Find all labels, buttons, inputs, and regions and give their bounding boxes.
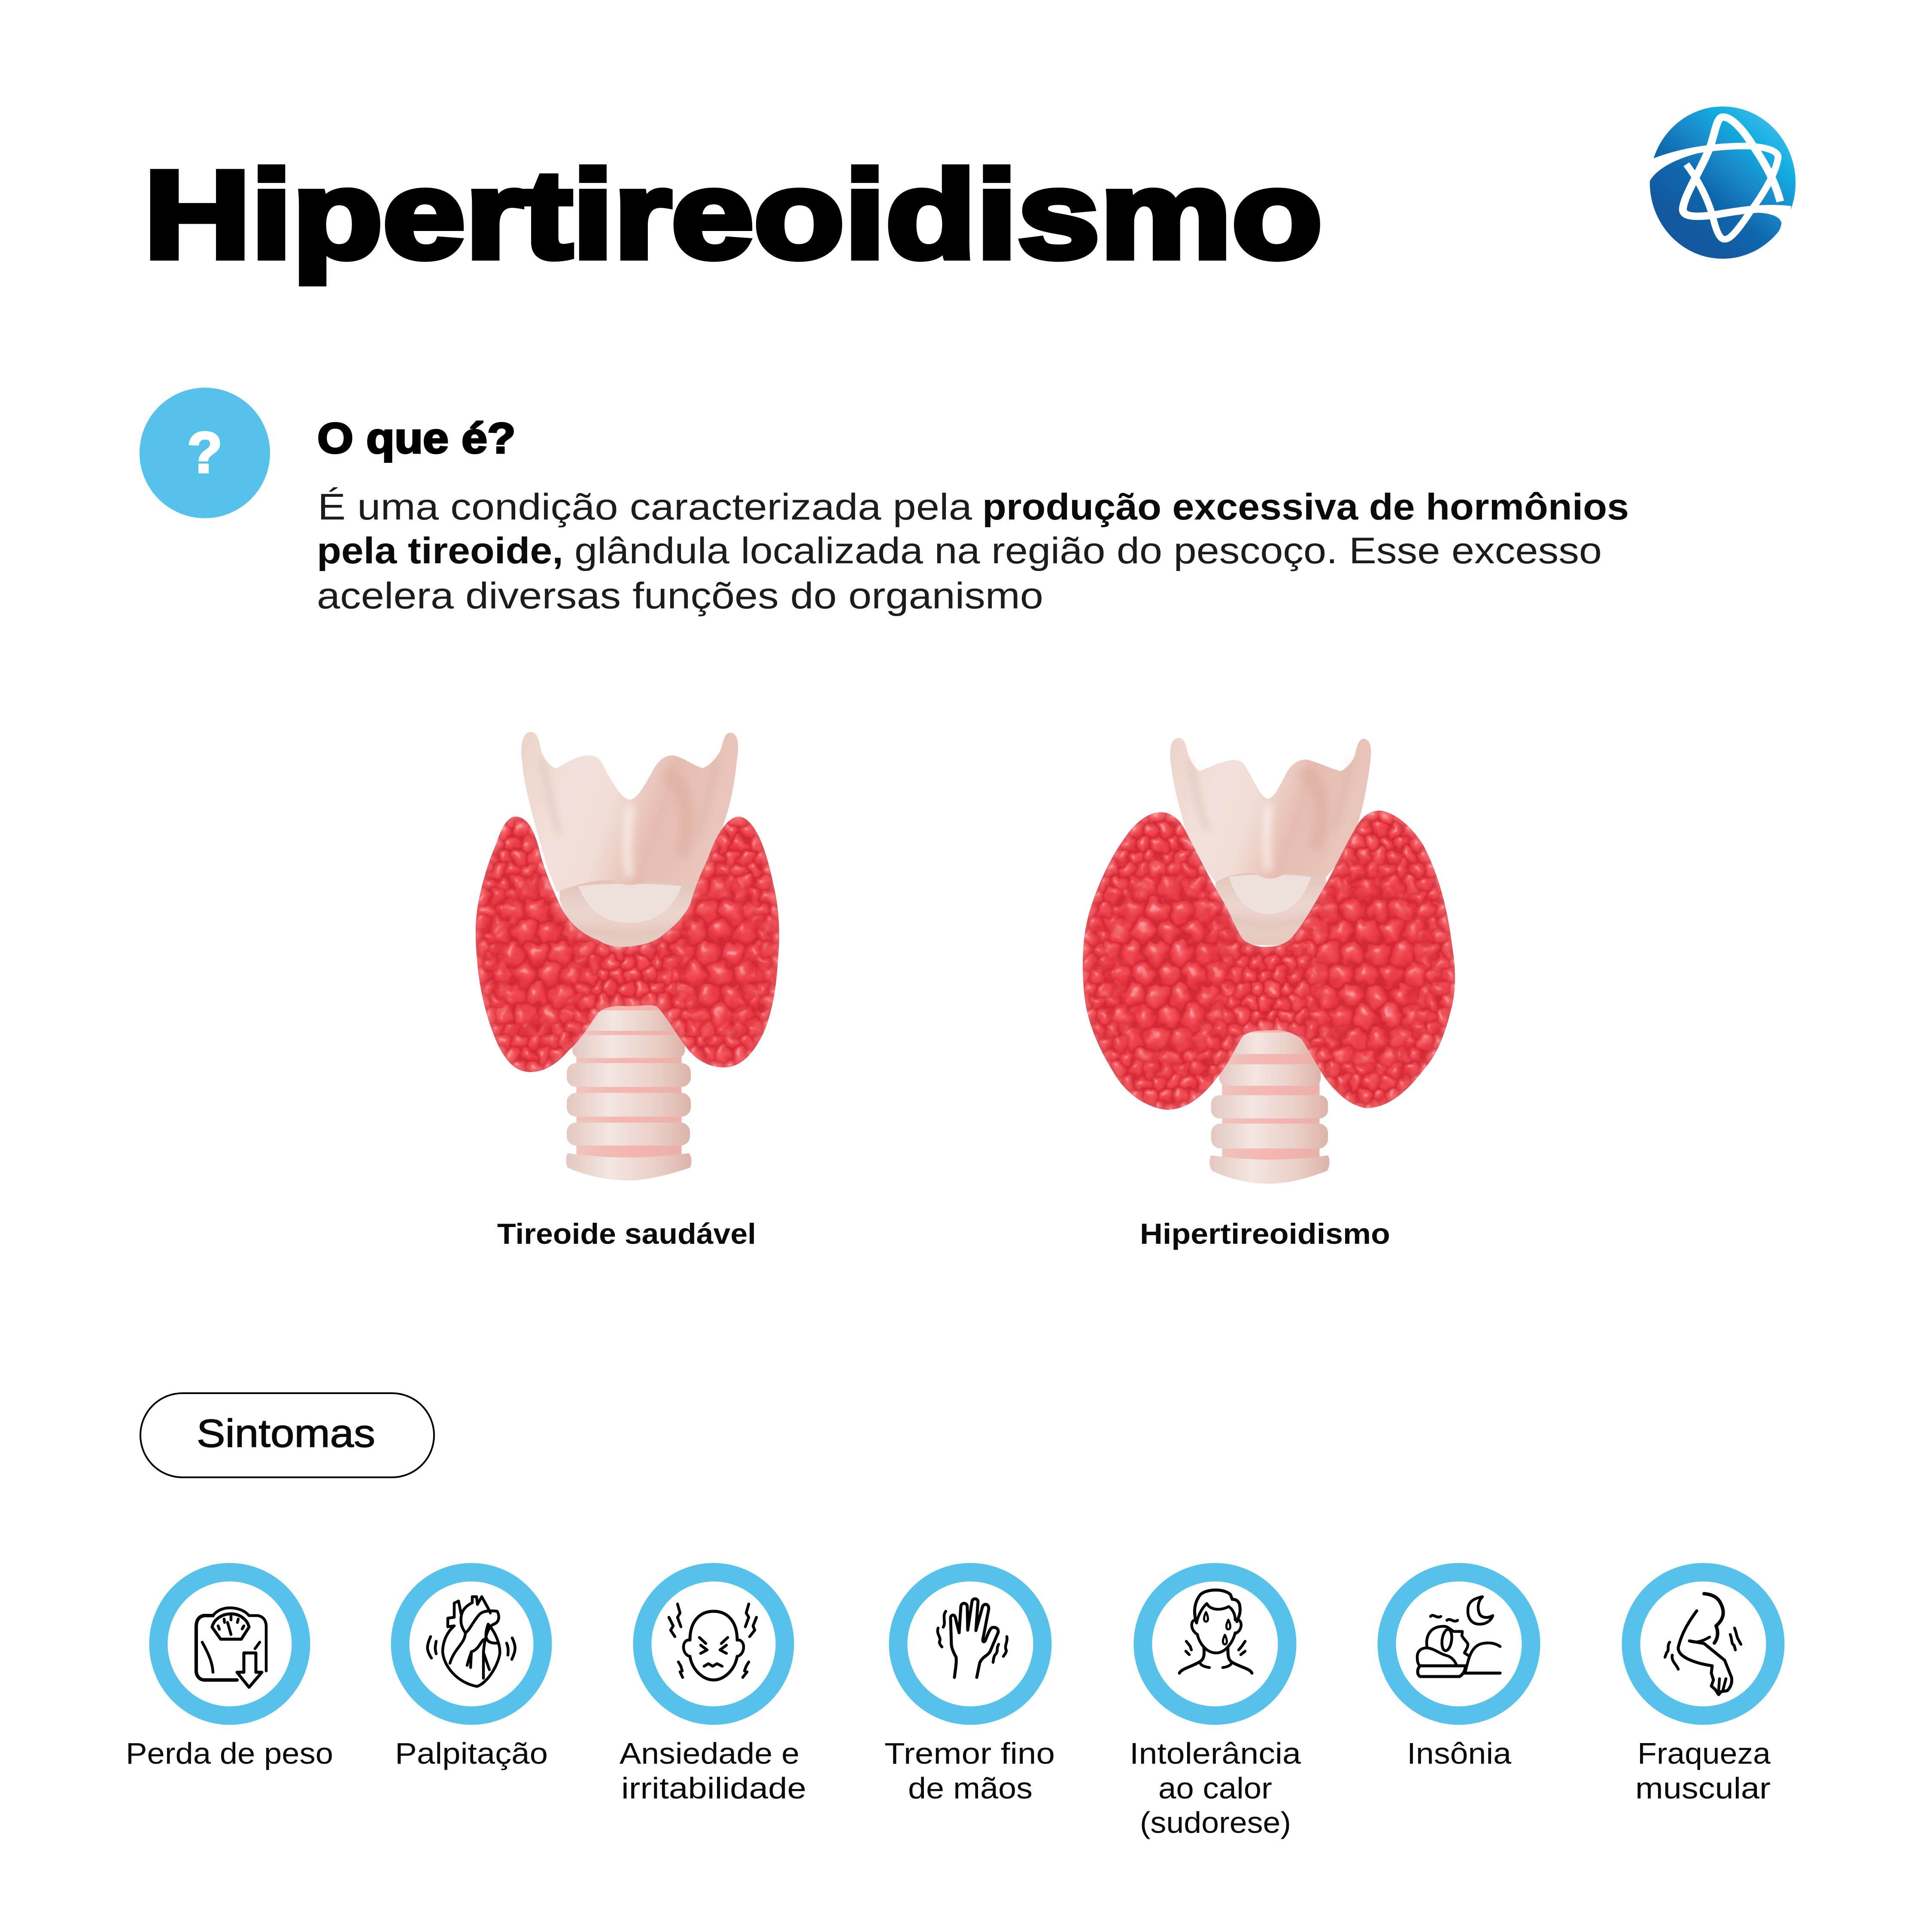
text block: definition: pela tireoide, (317, 530, 563, 571)
symptom: tremor (898, 1572, 1042, 1716)
thyroid lobes healthy (476, 817, 779, 1072)
label: fraqueza: muscular (1635, 1771, 1771, 1805)
icon: weak arm (1665, 1594, 1741, 1695)
label: fraqueza: Fraqueza (1637, 1737, 1771, 1770)
label: ansiedade (620, 1737, 806, 1805)
symptom: insonia (1387, 1572, 1531, 1716)
icon: question mark circle (140, 388, 270, 518)
icon: question mark circle: ? (187, 421, 222, 485)
thyroid cartilage (521, 732, 738, 892)
label: perda de peso: Perda de peso (126, 1737, 333, 1770)
cricoid (1215, 861, 1326, 945)
cricoid (559, 870, 701, 950)
icon: logo (1645, 106, 1806, 259)
text block: definition: acelera diversas funções do organismo (317, 575, 1043, 617)
icon: heart (428, 1597, 515, 1686)
icon: insomnia (1417, 1597, 1500, 1677)
caption: healthy: Tireoide saudável (497, 1218, 756, 1250)
symptom: palpitacao (400, 1572, 543, 1716)
label: tremor: Tremor fino (884, 1737, 1055, 1770)
thyroid lobes enlarged (1083, 811, 1455, 1110)
label: palpitacao: Palpitação (395, 1737, 548, 1770)
icon: sweating head (1179, 1590, 1252, 1673)
trachea (1209, 1028, 1330, 1184)
symptom: perda de peso (158, 1572, 301, 1716)
icon: angry face (669, 1604, 756, 1680)
title: Hipertireoidismo (144, 145, 1322, 285)
label: ansiedade: irritabilidade (621, 1771, 806, 1805)
label: ansiedade: Ansiedade e (620, 1737, 799, 1770)
symptom: intolerancia ao calor (1143, 1572, 1287, 1716)
thyroid cartilage (1170, 738, 1371, 882)
label: tremor (884, 1737, 1055, 1805)
label: intolerancia (1130, 1737, 1301, 1839)
label: fraqueza (1635, 1737, 1771, 1805)
pill: sintomas (140, 1393, 434, 1477)
symptom: fraqueza muscular (1631, 1572, 1775, 1716)
icon: hand (938, 1599, 1007, 1677)
label: tremor: de mãos (908, 1771, 1033, 1805)
label: intolerancia: (sudorese) (1140, 1806, 1291, 1839)
caption: hyperthyroidism: Hipertireoidismo (1140, 1218, 1390, 1250)
illustration: healthy thyroid (476, 732, 779, 1181)
symptom: ansiedade (642, 1572, 785, 1716)
text block: definition: É uma condição caracterizada pela (318, 486, 972, 528)
label: intolerancia: ao calor (1158, 1771, 1272, 1805)
text block: definition: produção excessiva de hormônios (982, 486, 1629, 528)
heading: o que e: O que é? (317, 414, 516, 462)
icon: scale (196, 1608, 266, 1687)
illustration: hyperthyroid thyroid (1065, 738, 1472, 1184)
text block: definition: glândula localizada na região do pescoço. Esse excesso (574, 530, 1602, 571)
label: insonia: Insônia (1407, 1737, 1511, 1770)
text block: definition (317, 486, 1629, 617)
label: intolerancia: Intolerância (1130, 1737, 1301, 1770)
pill: sintomas: Sintomas (197, 1412, 375, 1455)
trachea (566, 1002, 692, 1180)
